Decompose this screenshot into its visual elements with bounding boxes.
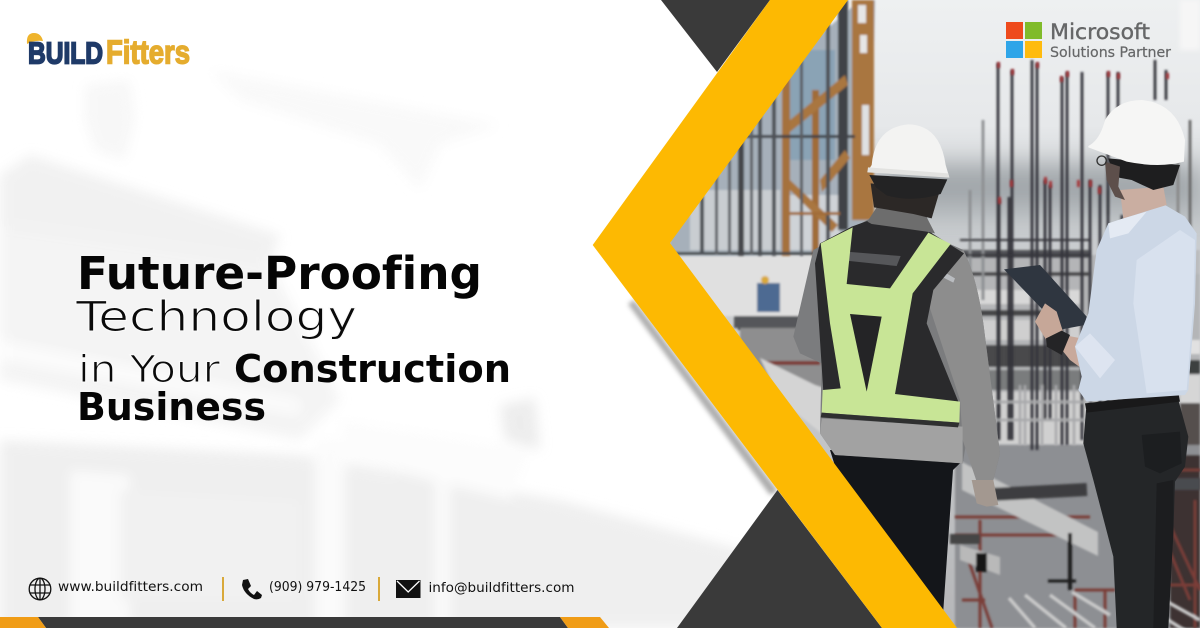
white hard hat: [1088, 100, 1185, 165]
neck: [1120, 187, 1167, 218]
vest: [815, 220, 964, 402]
white helmet: [867, 124, 949, 177]
hard hat mark: [27, 33, 43, 44]
trousers: [830, 450, 963, 610]
icon: envelope: [396, 580, 420, 598]
construction site photo: [650, 0, 1200, 628]
faded building background: [0, 70, 780, 628]
forearm and hand: [1063, 336, 1080, 367]
contact: email: [396, 580, 574, 598]
divider: [378, 577, 380, 601]
tablet: [1004, 265, 1087, 329]
logo: [27, 33, 190, 70]
grey jacket: [793, 207, 1000, 482]
glove hand: [972, 480, 998, 507]
icon: globe: [29, 578, 51, 600]
contact: email: info@buildfitters.com: [428, 581, 574, 596]
collar and neck: [867, 207, 935, 233]
belt: [1085, 395, 1180, 412]
title: Construction: [234, 347, 511, 391]
helmet strap: [869, 175, 947, 199]
Microsoft squares: [1006, 22, 1042, 58]
engineer with tablet: [1004, 100, 1197, 628]
logo: BUILD: [28, 36, 103, 70]
worker in safety vest: [793, 124, 1000, 610]
Microsoft Solutions Partner badge: [1006, 20, 1171, 61]
rebar red tips: [997, 62, 1169, 204]
title: Future-Proofing: [77, 247, 482, 300]
scaffold tower: [670, 0, 875, 330]
concrete deck and lower structure: [670, 250, 1200, 628]
title: in Your: [78, 348, 221, 391]
steel rebars: [960, 60, 1190, 450]
face: [1105, 162, 1125, 200]
contact: phone: [242, 579, 366, 599]
contact: website: [29, 578, 203, 600]
yellow chevron: [593, 0, 957, 628]
Microsoft Solutions Partner badge: Microsoft: [1050, 20, 1150, 44]
hair: [1108, 158, 1180, 190]
chevron shadow: [628, 300, 778, 495]
distant city haze: [880, 0, 1200, 210]
title: Technology: [75, 292, 357, 341]
top dark triangle: [661, 0, 770, 72]
wall scaffolding and beams: [950, 462, 1200, 628]
contact: website: www.buildfitters.com: [58, 580, 203, 595]
Microsoft Solutions Partner badge: Solutions Partner: [1050, 45, 1171, 61]
dark jeans: [1083, 400, 1188, 628]
title: [75, 247, 511, 429]
bottom dark triangle: [677, 490, 882, 628]
icon: phone: [242, 579, 262, 599]
footer bar: [0, 617, 609, 628]
divider: [222, 577, 224, 601]
light blue shirt: [1075, 205, 1197, 402]
contact: phone: (909) 979-1425: [269, 580, 366, 595]
logo: Fitters: [106, 34, 190, 70]
title: Business: [77, 385, 266, 429]
